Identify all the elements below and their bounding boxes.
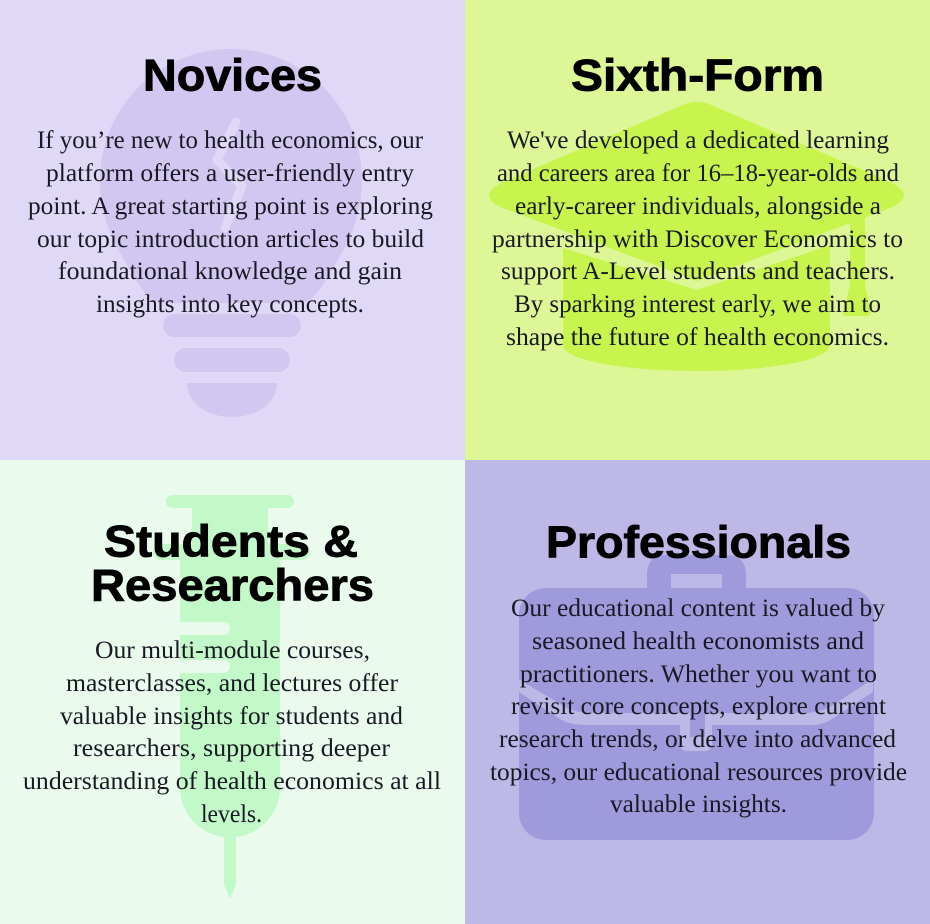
text block: novices description: If you’re new to health economics, our bbox=[37, 127, 424, 154]
heading: Students & Researchers: Researchers bbox=[91, 562, 374, 610]
heading: Students & Researchers: Students & bbox=[104, 518, 358, 566]
text block: students description bbox=[23, 637, 441, 828]
heading: Novices: Novices bbox=[143, 52, 322, 100]
text block: sixth-form description: and careers area for 16–18-year-olds and bbox=[497, 160, 899, 187]
panel: novices bbox=[0, 0, 465, 460]
text block: novices description bbox=[28, 127, 433, 318]
text block: students description: Our multi-module courses, bbox=[95, 637, 370, 664]
text block: novices description: platform offers a user-friendly entry bbox=[46, 160, 415, 187]
text block: professionals description: seasoned health economists and bbox=[532, 628, 865, 655]
text block: students description: understanding of health economics at all bbox=[23, 768, 441, 795]
text block: sixth-form description: We've developed a dedicated learning bbox=[507, 127, 890, 154]
icon: syringe bbox=[153, 495, 310, 899]
text block: sixth-form description: early-career individuals, alongside a bbox=[515, 193, 881, 220]
text block: novices description: our topic introduction articles to build bbox=[37, 226, 424, 253]
icon: briefcase bbox=[519, 555, 874, 840]
text block: sixth-form description: support A-Level students and teachers. bbox=[501, 258, 895, 285]
text block: students description: researchers, supporting deeper bbox=[73, 735, 391, 762]
text block: professionals description: research trends, or delve into advanced bbox=[499, 726, 896, 753]
heading: Professionals: Professionals bbox=[546, 518, 851, 568]
text block: professionals description bbox=[490, 595, 907, 818]
text block: sixth-form description: partnership with Discover Economics to bbox=[492, 226, 903, 253]
text block: novices description: foundational knowledge and gain bbox=[58, 258, 403, 285]
text block: sixth-form description: By sparking interest early, we aim to bbox=[514, 291, 881, 318]
icon: graduation cap bbox=[489, 102, 904, 371]
text block: novices description: insights into key concepts. bbox=[96, 291, 364, 318]
icon: light bulb bbox=[100, 49, 362, 417]
text block: professionals description: valuable insights. bbox=[610, 791, 787, 818]
text block: sixth-form description bbox=[492, 127, 903, 351]
heading: Sixth-Form: Sixth-Form bbox=[571, 52, 824, 100]
panel: students and researchers bbox=[0, 460, 465, 924]
text block: professionals description: topics, our educational resources provide bbox=[490, 759, 907, 786]
text block: students description: masterclasses, and lectures offer bbox=[66, 670, 399, 697]
text block: professionals description: revisit core concepts, explore current bbox=[511, 693, 886, 720]
text block: students description: valuable insights for students and bbox=[60, 703, 404, 730]
text block: novices description: point. A great starting point is exploring bbox=[28, 193, 433, 220]
heading: Students & Researchers bbox=[91, 518, 374, 610]
text block: students description: levels. bbox=[201, 801, 262, 828]
text block: sixth-form description: shape the future of health economics. bbox=[506, 324, 889, 351]
panel: professionals bbox=[465, 460, 930, 924]
panel: sixth-form bbox=[465, 0, 930, 460]
text block: professionals description: Our educational content is valued by bbox=[511, 595, 886, 622]
text block: professionals description: practitioners. Whether you want to bbox=[520, 661, 877, 688]
